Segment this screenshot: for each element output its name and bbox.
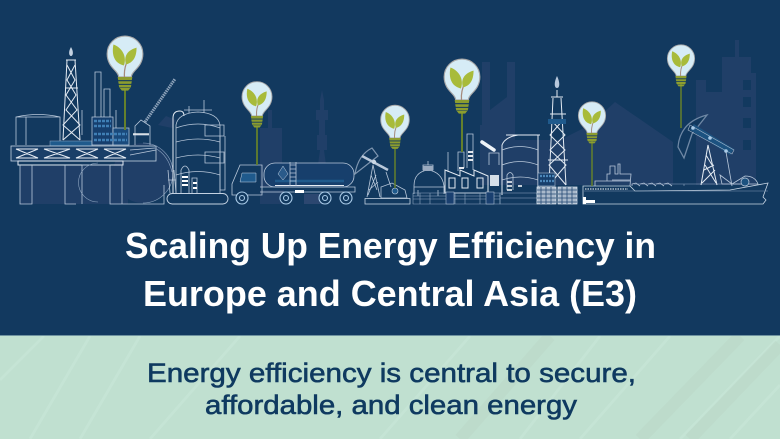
refinery dome: [414, 161, 444, 196]
rig building: [92, 117, 129, 145]
lightbulb 1: [107, 36, 143, 130]
illustration: second derrick: [537, 76, 577, 204]
truck cab: [232, 165, 262, 195]
lightbulb 3: [381, 105, 409, 188]
title: [125, 225, 656, 314]
subtitle: [147, 358, 636, 420]
refinery factory: [445, 170, 499, 193]
subtitle: affordable, and clean energy: [205, 390, 578, 420]
hatched crates: [537, 187, 577, 204]
truck tank: [260, 162, 355, 204]
subtitle: Energy efficiency is central to secure,: [147, 358, 636, 388]
title: Scaling Up Energy Efficiency in: [125, 225, 656, 266]
background silhouettes: [20, 40, 756, 204]
illustration: large pump jack: [678, 115, 758, 186]
rig tower: [63, 60, 80, 140]
lightbulb 6: [667, 45, 695, 128]
ship hull: [583, 183, 768, 204]
illustration: distillation tower: [167, 100, 228, 204]
lightbulb 2: [242, 82, 272, 165]
illustration: offshore rig: [11, 47, 175, 204]
rig tank: [16, 114, 60, 145]
title: Europe and Central Asia (E3): [143, 273, 637, 314]
bottom band: [0, 335, 780, 439]
rig smokestacks: [82, 72, 116, 135]
lightbulb 5: [578, 102, 606, 186]
tower base: [167, 194, 228, 204]
rig legs: [18, 161, 123, 165]
ship superstructure: [595, 164, 631, 186]
lightbulb 4: [444, 59, 480, 152]
refinery base: [413, 193, 500, 204]
rig deck: [11, 146, 156, 161]
illustration: refinery: [413, 134, 540, 204]
refinery stacks: [448, 134, 499, 172]
illustration: tanker ship: [583, 164, 768, 204]
rig crane: [133, 120, 150, 145]
background: [0, 0, 780, 336]
rig tanks outline: [78, 143, 173, 203]
refinery tower: [502, 135, 540, 195]
illustration: tanker truck: [232, 162, 355, 204]
truck wheels: [236, 192, 352, 204]
illustration: small pump jack: [355, 148, 410, 204]
